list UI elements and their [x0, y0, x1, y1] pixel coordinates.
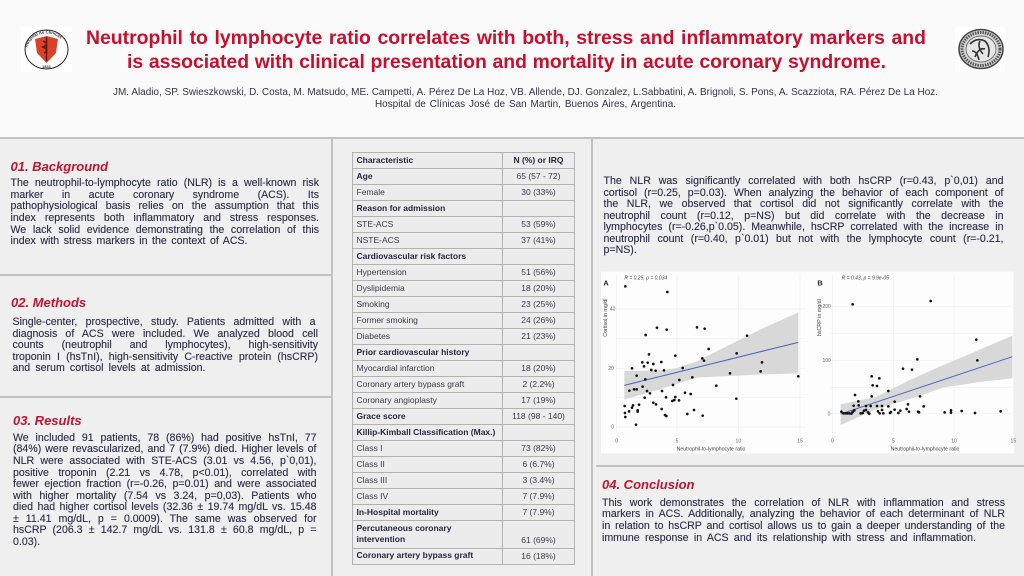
table: patient characteristics: Dyslipidemia [356, 283, 405, 293]
table: patient characteristics: 37 (41%) [521, 235, 556, 245]
table: patient characteristics: Killip-Kimball Classification (Max.) [356, 427, 495, 437]
text: methods [12, 316, 318, 374]
chart B: hsCRP vs NLR scatter [810, 272, 1016, 454]
table: patient characteristics: Class III [356, 475, 387, 485]
text: We included 91 patients, 78 (86%) had positive hsTnI, 77 [13, 432, 316, 444]
table: patient characteristics: 23 (25%) [521, 299, 556, 309]
axis labels B: 0 [831, 438, 834, 444]
icon: Hospital de Clinicas logo: Hospital de Clínicas [24, 30, 62, 48]
table: patient characteristics: 18 (20%) [521, 363, 556, 373]
table: patient characteristics: 65 (57 - 72) [517, 171, 560, 181]
table: patient characteristics: 3 (3.4%) [522, 475, 555, 485]
regression line A [624, 342, 798, 385]
text: Hospital de Clínicas José de San Martin, Buenos Aires, Argentina. [375, 99, 676, 110]
axis labels A: 5 [676, 438, 679, 444]
text: The NLR was significantly correlated with both hsCRP (r=0.43, p`0,01) and [604, 174, 1004, 186]
title [86, 26, 926, 72]
text: This work demonstrates the correlation of NLR with inflammation and stress [602, 496, 1005, 508]
table: patient characteristics: Diabetes [356, 331, 390, 341]
table: patient characteristics: 51 (56%) [521, 267, 556, 277]
text: is associated with clinical presentation and mortality in acute coronary syndrome. [127, 50, 886, 72]
text: correlation findings [604, 174, 1004, 256]
text: and serum cortisol levels at admission. [12, 362, 206, 374]
table: patient characteristics: STE-ACS [356, 219, 393, 229]
text: lymphocytes (r=-0.26,p`0.05). Meanwhile, hsCRP correlated with the increase in [604, 221, 1004, 233]
axis labels A: 15 [797, 438, 803, 444]
text: troponin I (hsTnI), high-sensitivity C-reactive protein (hsCRP) [12, 350, 318, 362]
text: hsCRP (206.3 ± 142.7 mg/dL vs. 131.8 ± 60.8 mg/dL, p = [13, 524, 316, 536]
table: patient characteristics: Myocardial infarction [356, 363, 434, 373]
table: patient characteristics: Coronary artery bypass graft [356, 550, 473, 560]
text: fewer ejection fraction (r=-0.26, p=0.01) and were associated [13, 478, 316, 490]
axis labels B: 5 [892, 438, 895, 444]
table: patient characteristics: 7 (7.9%) [522, 491, 555, 501]
axis labels A [603, 275, 803, 452]
table: patient characteristics: 73 (82%) [521, 443, 556, 453]
axis labels B: Neutrophil-to-lymphocyte ratio [891, 446, 960, 452]
text: conclusion [602, 496, 1005, 544]
text: counts (neutrophil and lymphocytes), high-sensitivity [12, 339, 318, 351]
axis labels A: 0 [615, 438, 618, 444]
table: patient characteristics: Characteristic [356, 155, 413, 165]
table: patient characteristics: Smoking [356, 299, 390, 309]
axis labels B: 10 [951, 438, 957, 444]
confidence band A [624, 312, 798, 399]
table: patient characteristics: 7 (7.9%) [522, 507, 555, 517]
text: pathophysiological basis relies on the assumption that this [10, 200, 319, 212]
table: patient characteristics: 17 (19%) [521, 395, 556, 405]
table: patient characteristics: Class II [356, 459, 385, 469]
table: patient characteristics: 24 (26%) [521, 315, 556, 325]
heading: results: 03. Results [13, 413, 82, 428]
data points B [840, 300, 1002, 415]
text: p=NS). [604, 244, 637, 256]
regression line B [841, 357, 1012, 414]
text: the NLR, we observed that cortisol did not significantly correlate with the [604, 198, 1004, 210]
table: patient characteristics: 6 (6.7%) [522, 459, 555, 469]
axis labels B [817, 275, 1016, 452]
text: neutrophil count (r=0.40, p`0.01) but not with the lymphocyte count (r=-0.21, [604, 232, 1004, 244]
table: patient characteristics: Class IV [356, 491, 388, 501]
table: patient characteristics: Cardiovascular risk factors [356, 251, 466, 261]
text: immune response in ACS and its relationship with stress and inflammation. [602, 532, 976, 544]
text: marker in acute coronary syndrome (ACS). Its [10, 188, 319, 200]
axis labels A: Neutrophil-to-lymphocyte ratio [677, 446, 746, 452]
table: patient characteristics: 118 (98 - 140) [512, 411, 565, 421]
header band [0, 0, 1024, 138]
text: ± 11.41 mg/dL, p = 0.0009). The same was observed for [13, 512, 316, 524]
text: index with stress markers in the context of ACS. [10, 235, 248, 247]
table: patient characteristics: 2 (2.2%) [522, 379, 555, 389]
text: background [10, 177, 320, 247]
data points A [623, 285, 800, 426]
text: Single-center, prospective, study. Patients admitted with a [12, 316, 316, 328]
text: We lack solid evidence demonstrating the correlation of this [10, 224, 319, 236]
axis labels B: R = 0.43, p = 9.9e-05 [842, 275, 889, 281]
table: patient characteristics: Female [356, 187, 385, 197]
text: died had higher cortisol levels (32.36 ± 19.74 mg/dL vs. 15.48 [13, 501, 316, 513]
axis labels B: 200 [822, 304, 831, 310]
table: patient characteristics: 21 (23%) [521, 331, 556, 341]
text: diagnosis of ACS were included. We analyzed blood cell [12, 328, 318, 340]
heading: methods: 02. Methods [11, 295, 86, 310]
text: index represents both inflammatory and stress responses. [10, 212, 319, 224]
chart A: cortisol vs NLR scatter [601, 272, 810, 454]
text: positive troponin (2.21 vs 4.78, p<0.01), correlated with [13, 466, 316, 478]
table: patient characteristics: Reason for admission [356, 203, 445, 213]
table: patient characteristics: Coronary angioplasty [356, 395, 437, 405]
table: patient characteristics: In-Hospital mortality [356, 507, 439, 517]
table: patient characteristics: 61 (69%) [521, 534, 556, 544]
axis labels B: B [817, 278, 823, 287]
text: (84%) were revascularized, and 7 (7.9%) died. Higher levels of [13, 443, 316, 455]
text: NLR were associated with STE-ACS (3.01 vs 4.56, p`0,01), [13, 455, 316, 467]
confidence band B [841, 336, 1012, 425]
table: patient characteristics: N (%) or IRQ [513, 155, 564, 165]
table: patient characteristics: Grace score [356, 411, 406, 421]
axis labels A: A [603, 278, 609, 287]
axis labels B: hsCRP in mg/dl [817, 299, 823, 336]
axis labels A: 0 [611, 425, 614, 431]
table: patient characteristics: 16 (18%) [521, 550, 556, 560]
axis labels A: 20 [608, 366, 614, 372]
heading: conclusion: 04. Conclusion [602, 477, 694, 492]
axis labels B: 100 [822, 358, 831, 364]
text: neutrophil count (r=0.12, p=NS) but did correlate with the decrease in [604, 210, 1004, 222]
axis labels B: 15 [1011, 438, 1016, 444]
axis labels A: 10 [736, 438, 741, 444]
text: with higher mortality (7.54 vs 3.24, p=0,03). Patients who [13, 490, 316, 502]
text: results [12, 432, 317, 548]
text: Neutrophil to lymphocyte ratio correlates with both, stress and inflammatory markers and [86, 26, 926, 48]
table: patient characteristics: 30 (33%) [521, 187, 556, 197]
table: patient characteristics: Coronary artery bypass graft [356, 379, 464, 389]
text: markers in ACS. Additionally, analyzing the behavior of each determinant of NLR [602, 508, 1005, 520]
icon: university seal [958, 28, 1004, 70]
table: patient characteristics: Prior cardiovascular history [356, 347, 469, 357]
text: cortisol (r=0.25, p=0.03). When analyzing the behavior of each component of [604, 186, 1004, 198]
text: JM. Aladio, SP. Swieszkowski, D. Costa, M. Matsudo, ME. Campetti, A. Pérez De La Hoz, VB. Allende, DJ. Gonzalez, L.Sabbatini, A. Brignoli, S. Pons, A. Scazziota, RA. Pérez De La Hoz. [113, 87, 938, 98]
table: patient characteristics: 18 (20%) [521, 283, 556, 293]
table: patient characteristics: Former smoking [356, 315, 418, 325]
table: patient characteristics: Age [356, 171, 373, 181]
axis labels A: Cortisol in mg/dl [603, 299, 609, 337]
table: patient characteristics: NSTE-ACS [356, 235, 399, 245]
table: patient characteristics: Percutaneous coronary intervention [356, 523, 451, 544]
axis labels B: 0 [828, 411, 831, 417]
text: The neutrophil-to-lymphocyte ratio (NLR) is a well-known risk [10, 177, 319, 189]
axis labels A: R = 0.25, p = 0.034 [624, 275, 667, 281]
heading: background: 01. Background [10, 159, 108, 174]
table: patient characteristics: Hypertension [356, 267, 407, 277]
icon: Hospital de Clinicas logo [24, 30, 68, 70]
text: in relation to hsCRP and cortisol allows us to gain a deeper understanding of the [602, 520, 1005, 532]
icon: Hospital de Clinicas logo: 1881 [42, 64, 52, 69]
axis labels A: 40 [610, 307, 616, 313]
table: patient characteristics: 53 (59%) [521, 219, 556, 229]
text: 0.03). [13, 536, 40, 548]
table: patient characteristics: Class I [356, 443, 382, 453]
table: patient characteristics [352, 152, 575, 564]
authors and affiliation [113, 87, 938, 110]
